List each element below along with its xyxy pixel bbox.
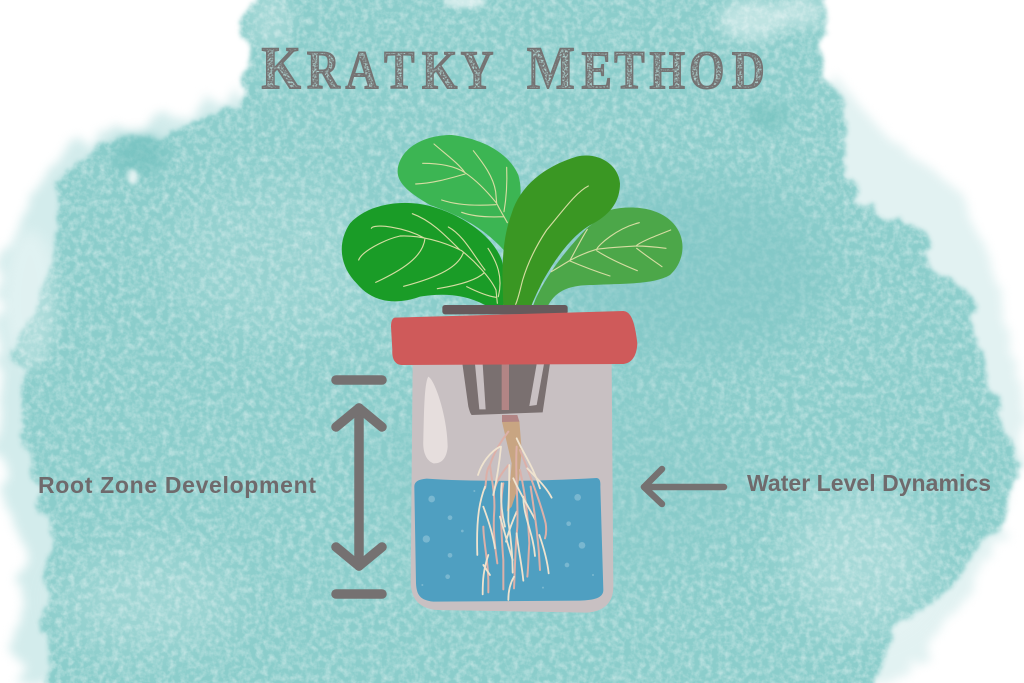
title: RATKY	[307, 40, 494, 100]
main stem	[502, 421, 522, 512]
title	[261, 35, 765, 103]
lid	[391, 305, 637, 365]
plant	[342, 135, 683, 305]
title: M	[527, 35, 575, 103]
double arrow: root zone height	[336, 380, 382, 594]
water	[414, 478, 603, 602]
roots	[477, 432, 552, 600]
leaf: upper light green	[398, 135, 521, 253]
label: water level: Water Level Dynamics	[747, 470, 991, 496]
jar body	[411, 362, 613, 613]
water bubbles	[421, 490, 594, 589]
red lid	[391, 311, 637, 365]
leaf: left dark green	[342, 203, 505, 305]
glass highlight	[423, 377, 448, 463]
leaf: right medium green	[533, 208, 683, 305]
net cup	[462, 363, 550, 415]
title: K	[261, 35, 301, 103]
cup rim	[442, 305, 568, 314]
jar	[411, 362, 613, 613]
label: root zone: Root Zone Development	[38, 472, 316, 498]
leaf: center green	[503, 156, 620, 305]
stem collar	[502, 415, 519, 422]
root system	[477, 415, 552, 600]
arrow: water level	[644, 469, 724, 504]
title: ETHOD	[581, 40, 765, 100]
